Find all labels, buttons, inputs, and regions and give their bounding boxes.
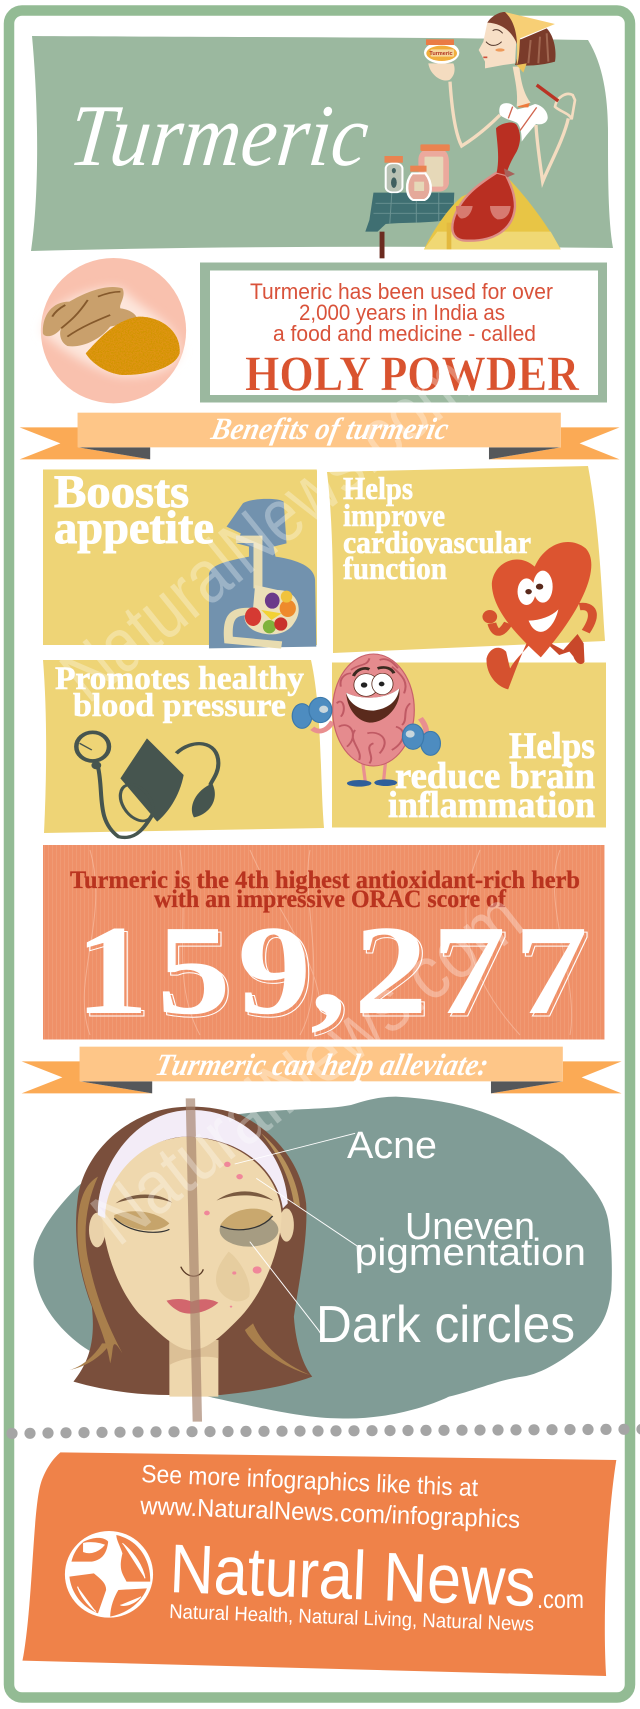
heading line 2: appetite <box>54 502 214 554</box>
dotted divider <box>6 1424 640 1439</box>
holy powder box <box>200 262 607 402</box>
box frame <box>200 262 607 402</box>
header banner <box>31 12 613 258</box>
ribbon text: Turmeric can help alleviate: <box>153 1047 492 1082</box>
woman's face <box>69 1098 312 1422</box>
icon: running heart <box>482 542 592 689</box>
root creases <box>52 292 120 337</box>
watermark 2: NaturalNews.com <box>76 874 538 1261</box>
panel background <box>43 660 324 833</box>
score: 159,277 <box>75 899 588 1041</box>
banner background <box>31 36 613 251</box>
panel: blood pressure <box>43 660 324 837</box>
text: improve: improve <box>343 497 445 533</box>
panel background <box>327 466 605 653</box>
watermark 1: NaturalNews.com <box>45 337 487 718</box>
panel background <box>43 470 317 645</box>
panel: brain inflammation <box>332 662 606 828</box>
holy powder: HOLY POWDER <box>245 345 580 401</box>
table and jars <box>365 144 454 258</box>
label: dark circles: Dark circles <box>316 1296 575 1354</box>
text: function: function <box>343 550 447 586</box>
text: antioxidant line 1: Turmeric is the 4th highest antioxidant-rich herb <box>70 867 580 894</box>
footer line 1: See more infographics like this at <box>141 1460 479 1502</box>
title: Turmeric <box>65 87 373 185</box>
heading: Boosts <box>54 466 189 518</box>
icon: digestive system <box>209 499 316 648</box>
logo: globe <box>65 1531 153 1618</box>
text: blood pressure: blood pressure <box>73 688 286 724</box>
label: acne: Acne <box>347 1125 437 1167</box>
line 3: a food and medicine - called <box>273 321 536 346</box>
logo wordmark: Natural News <box>168 1530 537 1621</box>
footer panel <box>22 1452 616 1676</box>
jar label: Turmeric <box>429 51 453 57</box>
teal blob <box>34 1097 612 1419</box>
box interior <box>210 270 598 395</box>
label: pigmentation: pigmentation <box>355 1232 586 1274</box>
ribbon tails and band <box>22 1047 622 1093</box>
turmeric root image <box>41 258 186 403</box>
footer line 2: www.NaturalNews.com/infographics <box>139 1492 521 1534</box>
logo .com: .com <box>537 1584 584 1614</box>
text: reduce brain: reduce brain <box>395 756 595 797</box>
panel background <box>332 662 606 828</box>
score shadow: 159,277 <box>78 902 591 1044</box>
texture lines <box>84 850 572 1035</box>
text: cardiovascular: cardiovascular <box>343 524 531 560</box>
text: promotes healthy: Promotes healthy <box>55 661 305 697</box>
ribbon: alleviate <box>22 1047 622 1093</box>
ribbon text: Benefits of turmeric <box>208 411 452 446</box>
text: helps: Helps <box>509 726 595 767</box>
text: antioxidant line 2: with an impressive ORAC score of <box>154 886 507 913</box>
callout lines <box>235 1133 358 1339</box>
panel: cardiovascular <box>327 466 605 653</box>
text: inflammation: inflammation <box>388 785 595 826</box>
footer background <box>22 1452 616 1676</box>
ribbon: benefits <box>20 411 620 459</box>
ribbon tails and band <box>20 413 620 459</box>
text: helps: Helps <box>343 470 413 506</box>
panel: boosts appetite <box>43 466 317 648</box>
panel background <box>43 845 604 1040</box>
tagline: Natural Health, Natural Living, Natural News <box>169 1601 534 1636</box>
turmeric powder <box>86 317 180 375</box>
panel: ORAC score <box>43 845 604 1044</box>
icon: blood pressure cuff <box>76 732 218 837</box>
ginger root <box>43 287 137 346</box>
soft glow <box>43 287 180 377</box>
pink circle <box>41 258 186 403</box>
skin conditions section <box>34 1097 612 1422</box>
line 1: Turmeric has been used for over <box>250 279 553 304</box>
label: uneven: Uneven <box>405 1206 535 1248</box>
icon: brain with dumbbells <box>292 654 440 787</box>
line 2: 2,000 years in India as <box>299 300 505 325</box>
woman illustration <box>424 12 575 249</box>
